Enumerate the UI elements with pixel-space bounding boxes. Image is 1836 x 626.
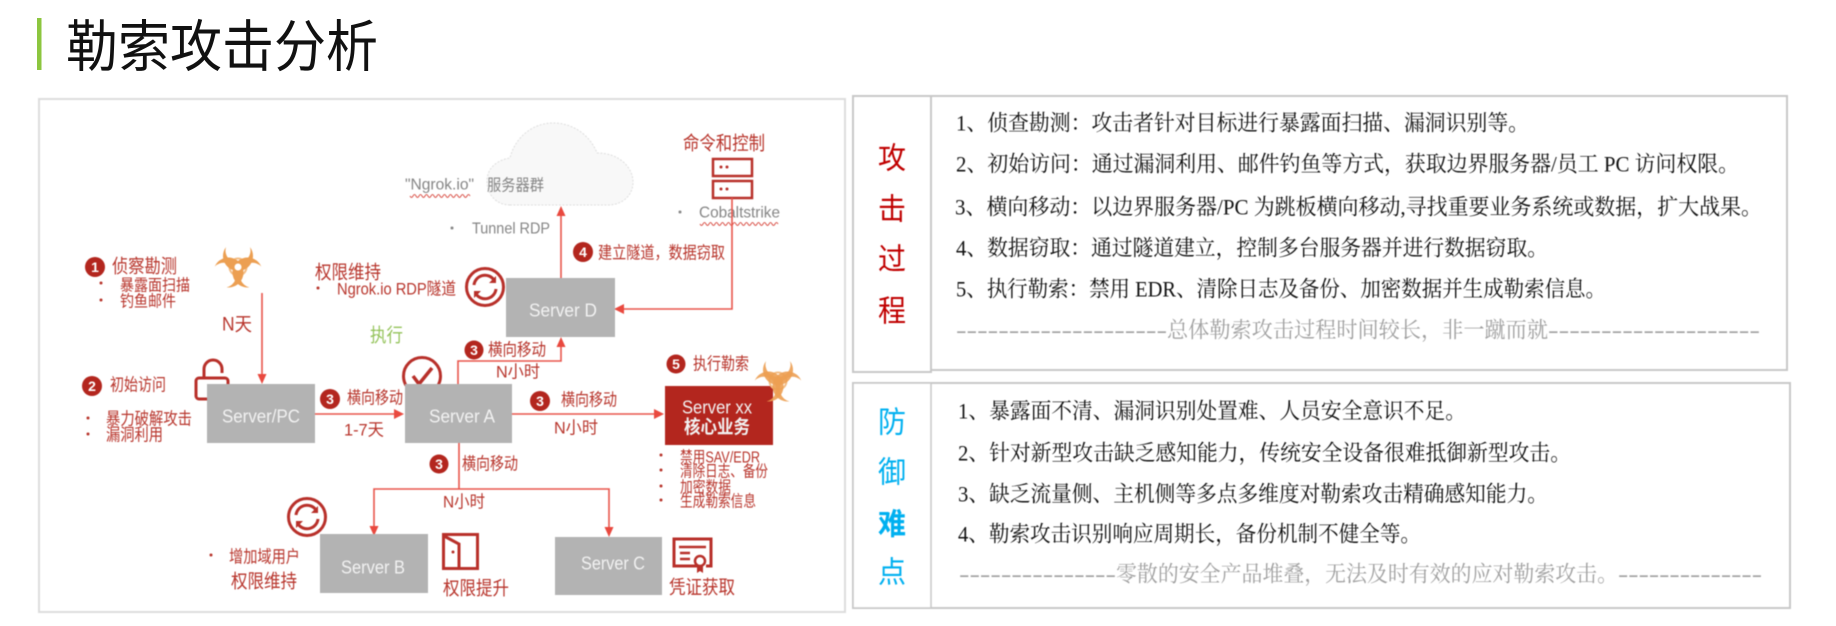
icon: door	[444, 534, 478, 570]
icon: biohazard server xx	[753, 361, 803, 404]
label: execute: 执行	[370, 324, 403, 346]
label: Ngrok.io cluster: "Ngrok.io"	[405, 176, 474, 194]
arrow: Server D to cloud	[556, 206, 566, 278]
arrow: attacker to Server/PC	[258, 293, 266, 384]
step 1 label: 钓鱼邮件	[120, 292, 176, 310]
note: fragmented products: --------------	[1618, 562, 1762, 586]
list: ransom actions: 禁用SAV/EDR	[680, 448, 760, 466]
list: difficulties: 1、暴露面不清、漏洞识别处置难、人员安全意识不足。	[958, 398, 1466, 424]
step 3 label to A: 横向移动	[347, 388, 403, 408]
label: N days: N天	[222, 314, 252, 336]
note: fragmented products: 零散的安全产品堆叠，无法及时有效的应对勒索攻击。	[1116, 562, 1618, 588]
label: credential theft: 凭证获取	[669, 576, 735, 598]
label: add domain user persistence: 权限维持	[231, 570, 297, 592]
box: Server xx core business: Server xx	[682, 396, 753, 418]
box: Server D	[506, 278, 615, 337]
icon: biohazard top	[213, 247, 263, 290]
box: Server/PC: Server/PC	[222, 406, 300, 426]
list: attack steps	[955, 110, 1762, 302]
box: Server A: Server A	[429, 406, 496, 426]
note: attack duration	[956, 318, 1760, 344]
step 3 label to A	[320, 388, 403, 409]
step 3 label to xx: 3	[536, 393, 544, 409]
icon: server stack	[713, 159, 752, 198]
note: attack duration: --------------------	[956, 318, 1167, 342]
step 2 label: 初始访问	[110, 376, 166, 394]
note: fragmented products: ---------------	[959, 562, 1116, 586]
step 2 label	[82, 376, 192, 444]
box: Server B	[320, 534, 428, 593]
label: 1-7 days: 1-7天	[344, 420, 384, 440]
label: privilege escalation: 权限提升	[443, 578, 509, 600]
box: Server/PC	[207, 384, 315, 443]
step 3 label to D: 横向移动	[488, 340, 546, 360]
list: ransom actions: 加密数据	[680, 478, 731, 496]
step 3 label down: 横向移动	[462, 454, 518, 474]
icon: cloud	[487, 123, 633, 205]
label: N hours to D: N小时	[496, 362, 540, 382]
step 5 label: 5	[672, 356, 680, 372]
panel: defence difficulties	[853, 383, 1790, 608]
step 2 label: 2	[88, 378, 96, 394]
box: Server A	[405, 384, 512, 443]
arrow: Server A to Servers B and C	[370, 443, 614, 537]
label: N hours down: N小时	[443, 492, 485, 512]
step 3 label to D: 3	[470, 342, 478, 358]
box: Server D: Server D	[529, 300, 597, 320]
list: ransom actions: 清除日志、备份	[680, 462, 768, 480]
step 3 label down	[430, 454, 518, 474]
step 3 label to D	[464, 340, 546, 360]
step 3 label down: 3	[435, 456, 443, 472]
panel: attack flow diagram	[39, 99, 845, 612]
step 2 label: 暴力破解攻击	[106, 410, 192, 428]
list: attack steps: 3、横向移动：以边界服务器/PC 为跳板横向移动,寻找重要业务系统或数据，扩大战果。	[955, 194, 1762, 220]
list: difficulties: 3、缺乏流量侧、主机侧等多点多维度对勒索攻击精确感知能力。	[958, 482, 1548, 506]
step 4 label: 4	[579, 244, 587, 260]
label: Cobaltstrike: Cobaltstrike	[699, 204, 780, 222]
list: difficulties: 2、针对新型攻击缺乏感知能力，传统安全设备很难抵御新型攻击。	[958, 440, 1571, 466]
panel: attack process	[853, 96, 1787, 372]
step 4 label	[573, 242, 725, 262]
step 3 label to xx: 横向移动	[561, 390, 617, 410]
label: Tunnel RDP: Tunnel RDP	[472, 220, 550, 238]
list: attack steps: 2、初始访问：通过漏洞利用、邮件钓鱼等方式，获取边界服务器/员工 PC 访问权限。	[956, 152, 1739, 178]
icon: check	[404, 358, 440, 394]
persistence label	[315, 262, 456, 298]
box: Server xx core business	[665, 386, 773, 445]
step 3 label to xx	[530, 390, 617, 411]
arrow: C2 to Server D	[614, 198, 732, 314]
heading: attack process	[878, 142, 906, 328]
icon: unlocked padlock	[196, 360, 228, 399]
step 5 label	[666, 354, 749, 374]
step 1 label: 暴露面扫描	[120, 276, 190, 294]
icon: refresh bottom	[288, 498, 326, 536]
heading: defence difficulties: 难	[878, 508, 906, 542]
list: attack steps: 5、执行勒索：禁用 EDR、清除日志及备份、加密数据并生成勒索信息。	[956, 276, 1606, 302]
arrow: Server A to Server D	[458, 337, 566, 384]
heading: defence difficulties: 点	[878, 556, 906, 590]
step 1 label: 侦察勘测	[112, 256, 177, 278]
heading: defence difficulties: 防	[878, 406, 906, 440]
heading: defence difficulties	[878, 406, 906, 590]
step 5 label: 执行勒索	[693, 354, 749, 374]
list: attack steps: 4、数据窃取：通过隧道建立，控制多台服务器并进行数据窃取。	[956, 236, 1548, 262]
persistence label: Ngrok.io RDP隧道	[337, 280, 456, 298]
label: N hours to xx: N小时	[554, 418, 598, 438]
box: Server C	[555, 537, 662, 595]
title: 勒索攻击分析	[66, 2, 378, 84]
label: command and control: 命令和控制	[683, 132, 765, 154]
list: difficulties	[958, 398, 1571, 548]
step 2 label: 漏洞利用	[106, 426, 163, 444]
heading: attack process: 程	[878, 296, 906, 328]
heading: attack process: 击	[878, 194, 906, 226]
list: ransom actions: 生成勒索信息	[680, 492, 756, 510]
heading: defence difficulties: 御	[878, 456, 906, 490]
label: add domain user persistence	[210, 548, 300, 592]
step 4 label: 建立隧道，数据窃取	[598, 244, 725, 262]
heading: attack process: 过	[878, 244, 906, 276]
box: Server xx core business: 核心业务	[684, 416, 750, 438]
label: add domain user persistence: 增加域用户	[229, 548, 300, 566]
icon: refresh top	[466, 268, 504, 306]
list: attack steps: 1、侦查勘测：攻击者针对目标进行暴露面扫描、漏洞识别等。	[956, 110, 1529, 136]
box: Server C: Server C	[581, 552, 645, 574]
list: difficulties: 4、勒索攻击识别响应周期长，备份机制不健全等。	[958, 522, 1421, 548]
step 1 label: 1	[91, 259, 99, 275]
persistence label: 权限维持	[315, 262, 381, 284]
note: fragmented products	[959, 562, 1762, 588]
note: attack duration: --------------------	[1548, 318, 1760, 342]
icon: certificate	[674, 539, 711, 573]
label: Cobaltstrike	[678, 204, 780, 226]
list: ransom actions	[660, 448, 768, 510]
label: Ngrok.io cluster	[405, 176, 544, 198]
arrow: Server A to Server xx	[512, 409, 664, 419]
arrow: Server/PC to Server A	[315, 409, 404, 419]
step 1 label	[85, 256, 190, 310]
note: attack duration: 总体勒索攻击过程时间较长，非一蹴而就	[1167, 318, 1548, 344]
label: Ngrok.io cluster: 服务器群	[487, 176, 544, 194]
heading: attack process: 攻	[878, 142, 906, 176]
box: Server B: Server B	[341, 556, 405, 578]
step 3 label to A: 3	[326, 391, 334, 407]
